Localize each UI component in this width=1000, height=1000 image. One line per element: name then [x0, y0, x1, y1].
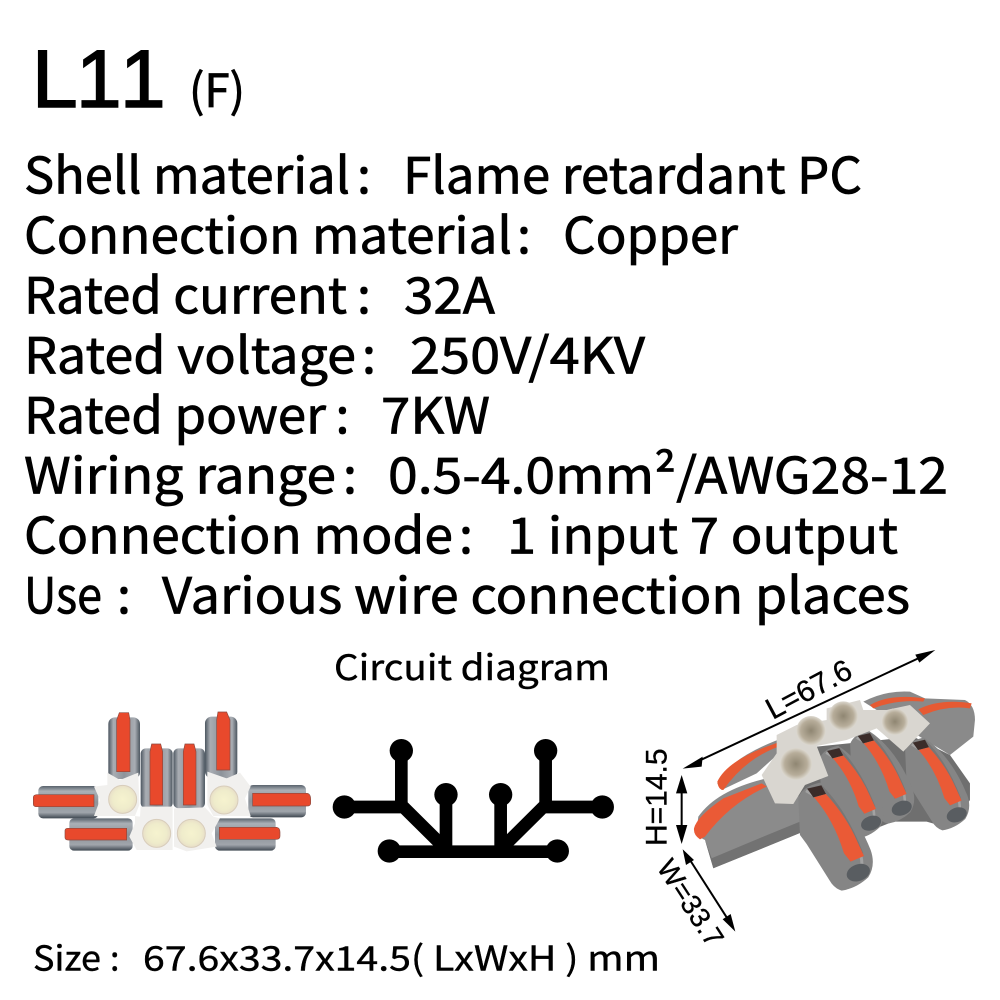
spec: connection material: Copper — [563, 196, 739, 268]
circuit diagram heading: Circuit diagram — [334, 640, 610, 691]
spec: shell material — [24, 136, 862, 208]
spec: rated current: 32A — [404, 256, 496, 328]
specification list — [24, 136, 948, 628]
title: (F) — [189, 55, 245, 121]
spec: connection material: Connection material — [24, 196, 512, 268]
photo: connector top view — [33, 712, 311, 851]
title: L11 — [32, 34, 166, 125]
spec: wiring range: 0.5-4.0mm²/AWG28-12 — [388, 436, 948, 508]
size caption: 67.6x33.7x14.5( LxWxH ) mm — [143, 932, 660, 980]
spec: connection mode: Connection mode — [24, 496, 453, 568]
spec: wiring range: : — [343, 436, 357, 508]
size caption: : — [110, 932, 119, 980]
icon: circuit diagram — [333, 739, 614, 863]
spec: wiring range — [24, 436, 948, 508]
spec: rated current: Rated current — [24, 256, 347, 328]
spec: rated voltage: : — [362, 316, 376, 388]
spec: connection mode: : — [459, 496, 473, 568]
dimension: length — [683, 650, 935, 769]
spec: use: Various wire connection places — [162, 556, 910, 628]
spec: connection material — [24, 196, 739, 268]
title — [32, 34, 245, 125]
spec: rated power: Rated power — [24, 376, 327, 448]
photo: connector perspective view with dimensions — [641, 650, 975, 952]
dimension: height: H=14.5 — [641, 748, 674, 846]
spec: rated power — [24, 376, 490, 448]
spec: rated power: 7KW — [381, 376, 490, 448]
spec: wiring range: Wiring range — [24, 436, 336, 508]
spec: rated voltage: Rated voltage — [24, 316, 356, 388]
spec: connection mode: 1 input 7 output — [507, 496, 898, 568]
dimension: width: W=33.7 — [651, 854, 730, 952]
spec: shell material: Flame retardant PC — [403, 136, 862, 208]
spec: rated current — [24, 256, 496, 328]
size caption: Size — [33, 932, 101, 980]
spec: rated voltage — [24, 316, 645, 388]
spec: connection mode — [24, 496, 898, 568]
connector body — [694, 691, 975, 891]
spec: use: Use — [24, 556, 102, 628]
spec: rated current: : — [357, 256, 371, 328]
spec: use: : — [117, 556, 131, 628]
spec: shell material: : — [357, 136, 371, 208]
spec: rated power: : — [336, 376, 349, 448]
spec: rated voltage: 250V/4KV — [410, 316, 645, 388]
spec: connection material: : — [517, 196, 531, 268]
spec: shell material: Shell material — [24, 136, 350, 208]
dimension: length: L=67.6 — [760, 654, 858, 726]
